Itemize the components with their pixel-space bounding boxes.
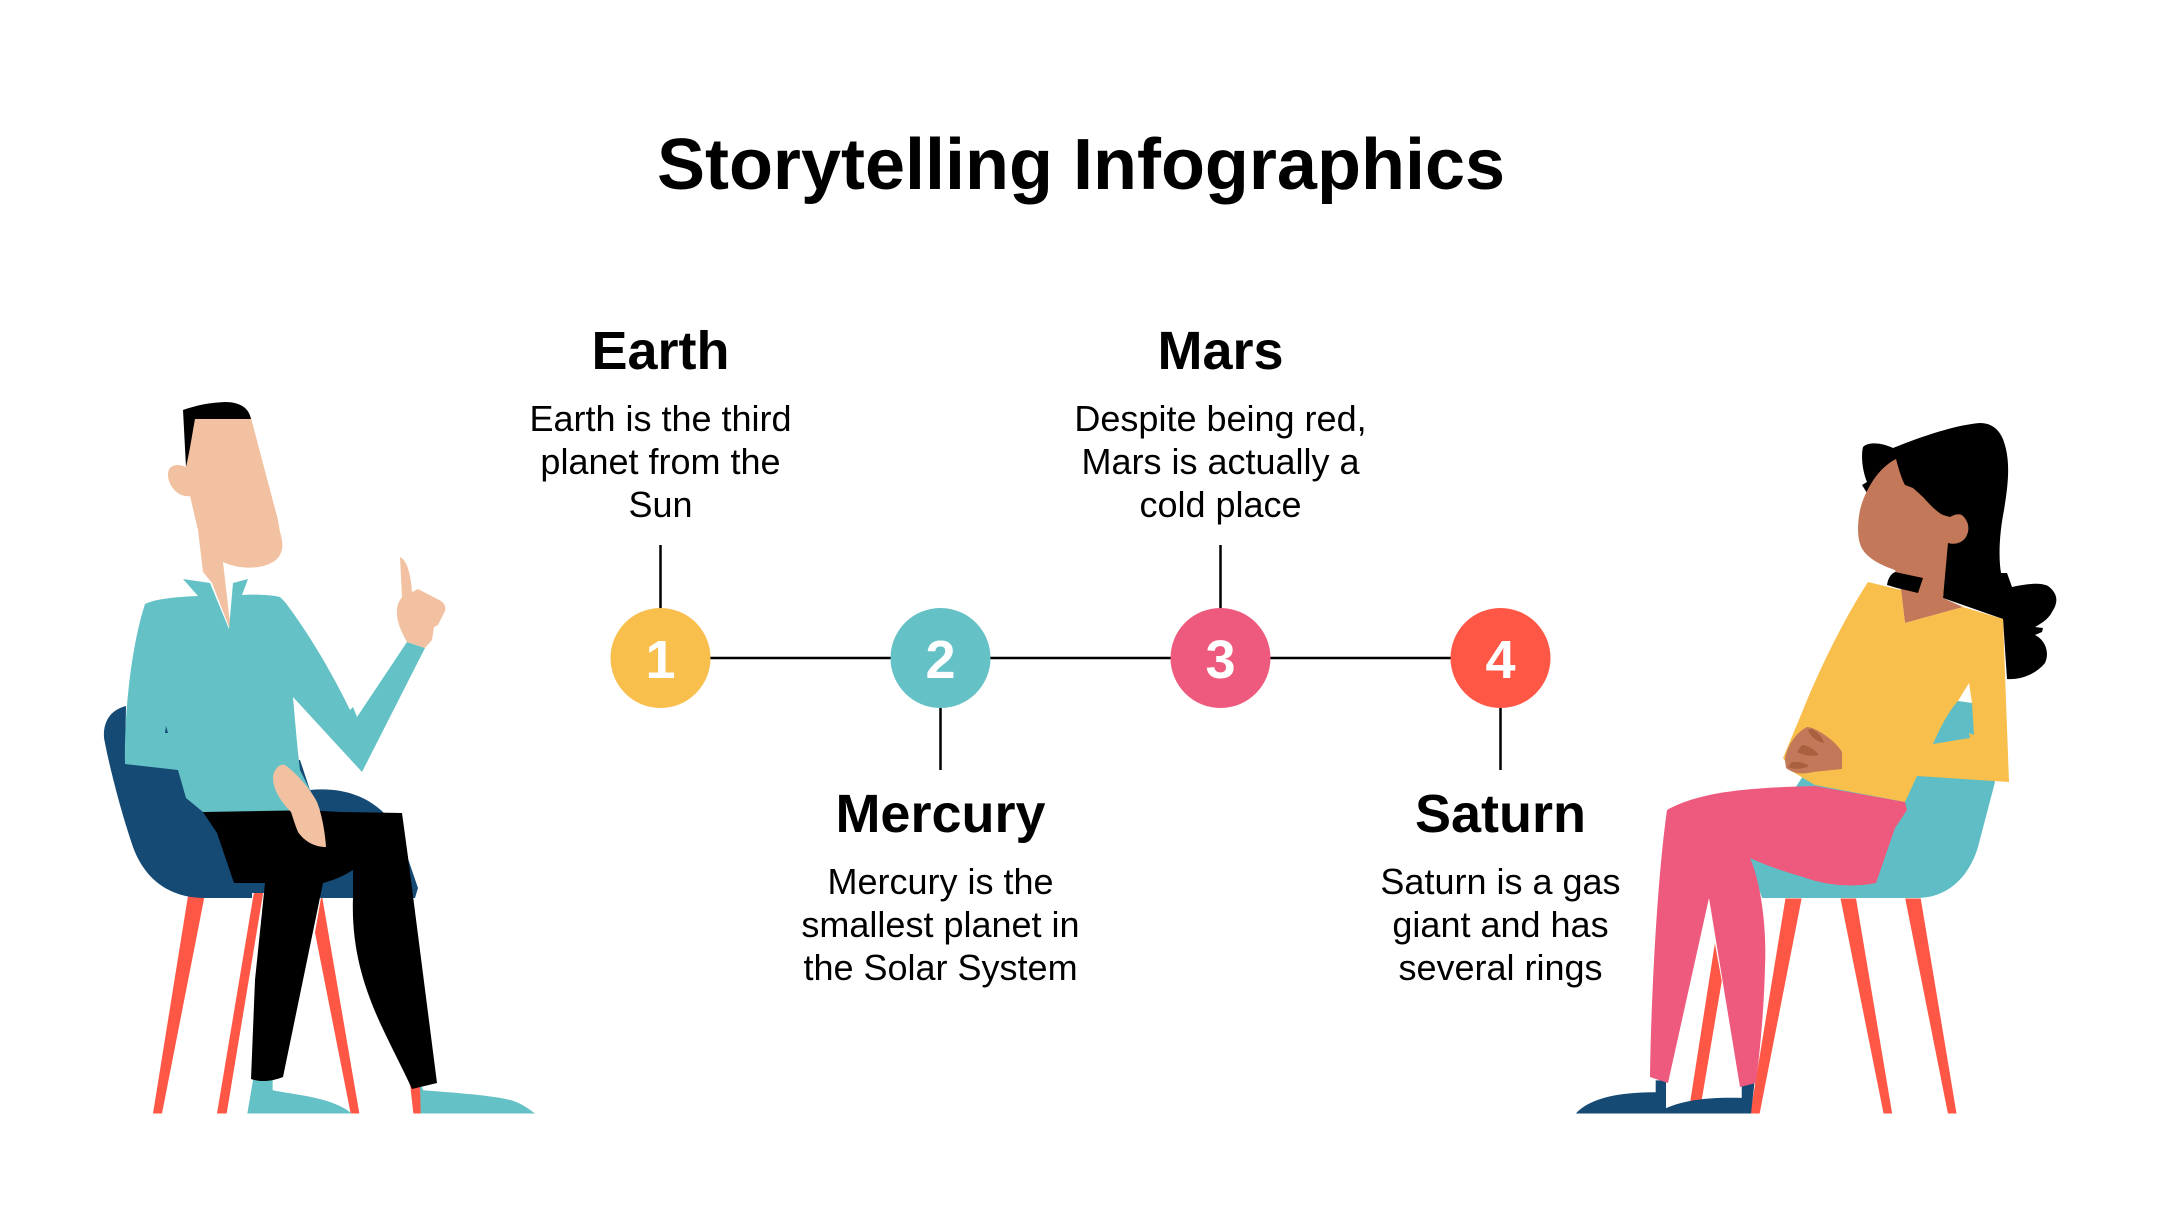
- trousers: [203, 809, 437, 1089]
- description: Earth: [529, 398, 792, 525]
- number badge 3: 3: [1205, 630, 1236, 690]
- description: Earth: planet from the: [540, 441, 781, 482]
- sweater: [1783, 582, 2009, 802]
- shoes: [1576, 1080, 1754, 1113]
- heading: Mercury: Mercury: [835, 784, 1046, 844]
- clasped hands: [1785, 727, 1842, 773]
- number badge 1: [610, 608, 710, 708]
- step 3: Mars: [1074, 321, 1367, 708]
- title: Storytelling Infographics: [657, 125, 1505, 205]
- hair: [1862, 423, 2056, 679]
- description: Mercury: smallest planet in: [801, 904, 1080, 945]
- step 1: Earth: [529, 321, 792, 708]
- description: Saturn: [1380, 861, 1621, 988]
- illustration: seated woman listening: [1576, 423, 2056, 1113]
- illustration: seated man pointing: [104, 402, 535, 1114]
- timeline connector: [660, 545, 1500, 770]
- number badge 4: 4: [1485, 630, 1516, 690]
- chair legs: [1688, 898, 1957, 1113]
- step 4: Saturn: [1380, 608, 1621, 988]
- head and neck: [1858, 459, 1968, 623]
- number badge 1: 1: [645, 630, 676, 690]
- description: Mars: Despite being red,: [1074, 398, 1367, 439]
- collar hair: [1887, 572, 1923, 593]
- heading: Earth: Earth: [591, 321, 730, 381]
- description: Mercury: the Solar System: [803, 947, 1078, 988]
- shoes: [247, 1078, 535, 1114]
- shirt fold mark: [165, 726, 168, 733]
- step 2: Mercury: [801, 608, 1080, 988]
- hair: [183, 402, 251, 467]
- trousers: [1650, 786, 1907, 1087]
- resting hand: [273, 765, 326, 847]
- chair seat: [104, 706, 418, 898]
- description: Earth: Earth is the third: [529, 398, 792, 439]
- number badge 2: [890, 608, 990, 708]
- gap under arm: [1958, 683, 1972, 703]
- description: Earth: Sun: [628, 484, 693, 525]
- description: Saturn: Saturn is a gas: [1380, 861, 1621, 902]
- head and neck: [168, 418, 282, 632]
- number badge 2: 2: [925, 630, 956, 690]
- description: Mercury: Mercury is the: [827, 861, 1054, 902]
- raised hand: [397, 557, 445, 648]
- number badge 3: [1170, 608, 1270, 708]
- description: Mercury: [801, 861, 1080, 988]
- number badge 4: [1450, 608, 1550, 708]
- description: Saturn: several rings: [1398, 947, 1603, 988]
- heading: Mars: Mars: [1157, 321, 1284, 381]
- shirt: [125, 579, 425, 812]
- description: Saturn: giant and has: [1392, 904, 1609, 945]
- description: Mars: [1074, 398, 1367, 525]
- description: Mars: cold place: [1139, 484, 1302, 525]
- chair legs: [153, 892, 423, 1114]
- chair seat: [1749, 770, 1995, 898]
- description: Mars: Mars is actually a: [1081, 441, 1361, 482]
- heading: Saturn: Saturn: [1415, 784, 1586, 844]
- chair back: [1933, 701, 1974, 744]
